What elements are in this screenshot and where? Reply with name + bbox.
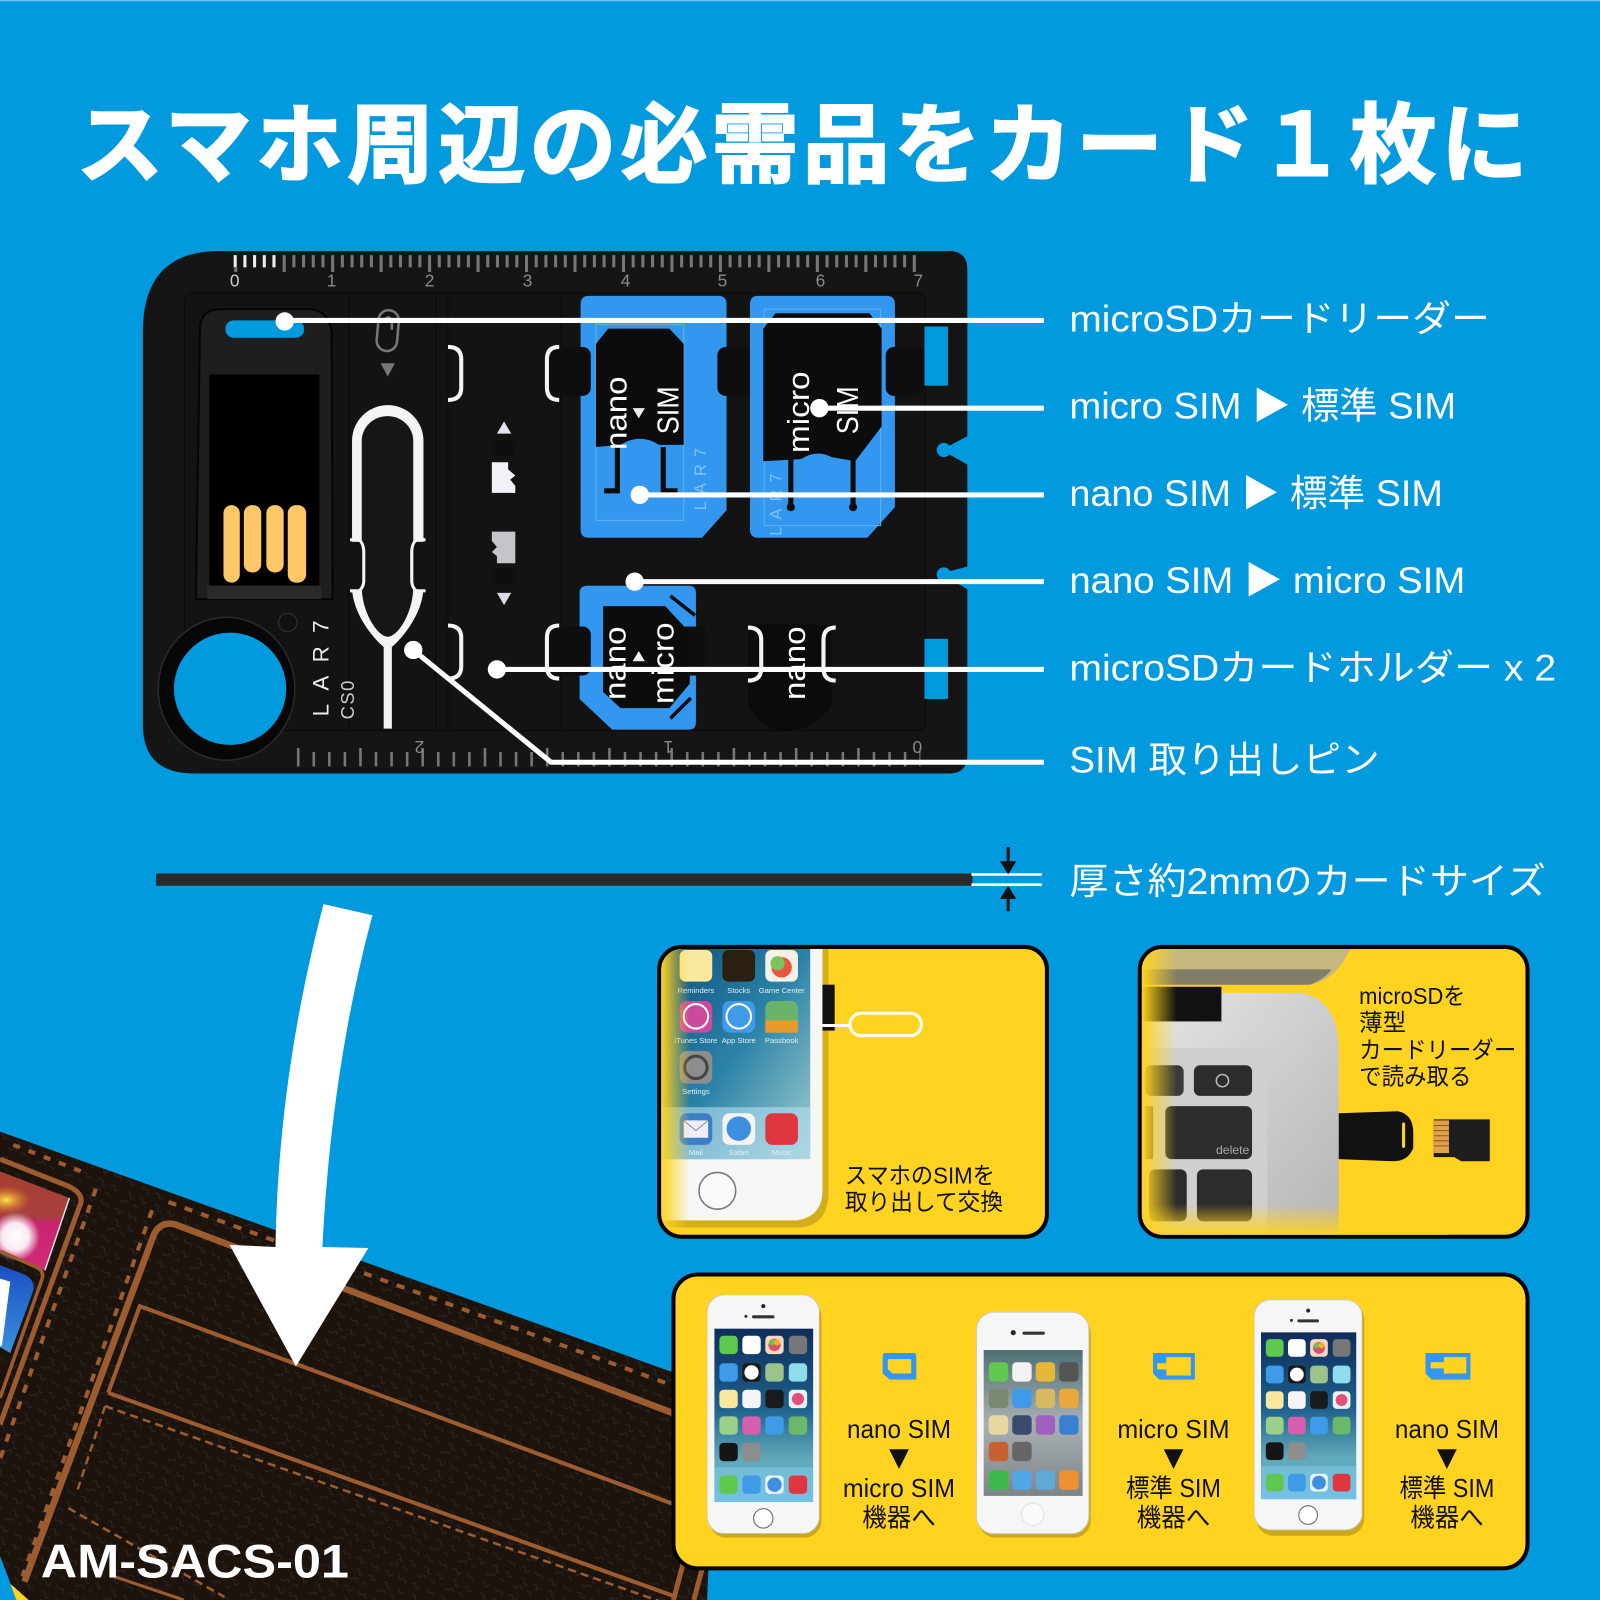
multi-tool card xyxy=(143,251,968,773)
top ruler: 6 xyxy=(816,271,825,291)
column text: micro to standard xyxy=(1117,1416,1230,1533)
bottom ruler xyxy=(297,737,922,759)
nano SIM slot xyxy=(748,624,832,731)
column text: nano to micro: micro SIM xyxy=(843,1475,955,1503)
bottom ruler: 1 xyxy=(664,737,673,757)
icon: nano adapter xyxy=(883,1353,916,1380)
top ruler: 1 xyxy=(327,271,336,291)
label: nano SIM: nano SIM ▶ 標準 SIM xyxy=(1069,473,1443,514)
label: nano to micro: nano SIM ▶ micro SIM xyxy=(1069,560,1465,601)
label: SIM pin: SIM 取り出しピン xyxy=(1069,739,1380,780)
adapter: micro to standard: micro xyxy=(782,371,816,453)
column text: micro to standard: 機器へ xyxy=(1137,1505,1210,1533)
fade left xyxy=(1142,949,1177,1235)
USB microSD reader xyxy=(196,309,333,599)
label: microSD holder: microSDカードホルダー x 2 xyxy=(1069,648,1556,689)
laptop keyboard close-up: delete xyxy=(1216,1143,1250,1157)
bottom ruler: 0 xyxy=(913,737,922,757)
adapter: nano to standard: nano xyxy=(600,377,634,450)
leader: nano to micro xyxy=(626,572,1044,591)
column text: nano to micro: ▼ xyxy=(882,1439,916,1476)
adapter: nano to standard: SIM xyxy=(652,386,686,434)
leader: micro SIM xyxy=(810,399,1044,417)
fade bottom xyxy=(1142,1204,1448,1237)
USB reader inserted xyxy=(1339,1111,1413,1161)
caption: で読み取る xyxy=(1359,1064,1471,1090)
icon: micro adapter xyxy=(1153,1353,1195,1380)
panel: SIM compatibility xyxy=(673,1274,1528,1568)
column text: nano to standard: ▼ xyxy=(1430,1439,1464,1476)
top ruler: 2 xyxy=(425,271,434,291)
column text: nano to standard: 機器へ xyxy=(1410,1505,1484,1533)
column text: nano to micro: nano SIM xyxy=(847,1416,951,1444)
wallet leather texture xyxy=(0,1132,714,1600)
brand marks: LAR7 xyxy=(309,607,334,716)
phone close-up: Mail xyxy=(689,1148,703,1157)
caption: microSDを xyxy=(1359,983,1465,1009)
adapter: micro to standard: SIM xyxy=(831,386,865,434)
icon: paperclip xyxy=(376,309,400,377)
icon: nano to standard adapter xyxy=(1426,1353,1470,1380)
tray structure lines xyxy=(349,296,561,729)
panel: microSD reader xyxy=(1140,947,1528,1237)
SIM ejector pin xyxy=(347,405,429,729)
caption: 取り出して交換 xyxy=(845,1189,1003,1215)
wallet stitching and seams xyxy=(0,1145,704,1600)
card body xyxy=(143,251,967,773)
brand marks xyxy=(309,607,358,719)
laptop keyboard close-up xyxy=(1142,949,1350,1235)
card thickness side view xyxy=(156,847,1042,911)
adapter: micro to standard xyxy=(750,296,924,538)
model number: AM-SACS-01 xyxy=(41,1536,349,1588)
top ruler: 5 xyxy=(718,271,727,291)
key ring hole xyxy=(158,613,297,760)
feature labels xyxy=(1069,299,1556,780)
big white arrow xyxy=(230,904,372,1366)
phone close-up: Settings xyxy=(682,1087,710,1096)
phone close-up: App Store xyxy=(722,1036,756,1045)
column text: nano to micro: 機器へ xyxy=(862,1505,936,1533)
caption: 薄型 xyxy=(1359,1010,1406,1036)
caption xyxy=(1359,983,1516,1090)
wallet illustration xyxy=(0,1132,714,1600)
phone close-up: Passbook xyxy=(765,1036,799,1045)
leader: microSD holder xyxy=(488,660,1044,679)
leader lines xyxy=(276,312,1044,762)
credit card: blue xyxy=(0,1265,34,1353)
top ruler: 4 xyxy=(621,271,631,291)
phone close-up: Game Center xyxy=(759,986,805,995)
adapter: nano to micro: micro xyxy=(646,622,680,704)
phone close-up: Safari xyxy=(729,1148,749,1157)
label: micro SIM: micro SIM ▶ 標準 SIM xyxy=(1069,385,1456,426)
column text: micro to standard: ▼ xyxy=(1157,1439,1190,1476)
top ruler: 3 xyxy=(523,271,532,291)
title: スマホ周辺の必需品をカード１枚に xyxy=(77,98,1528,195)
column text: micro to standard: micro SIM xyxy=(1117,1416,1230,1444)
yellow sliver xyxy=(10,1584,29,1600)
caption xyxy=(845,1163,1003,1215)
phone: iPhone 4 center xyxy=(977,1312,1091,1538)
microSD card xyxy=(1434,1119,1490,1161)
top ruler: 7 xyxy=(914,271,923,291)
nano SIM slot: nano xyxy=(778,627,812,700)
column text: nano to standard: nano SIM xyxy=(1395,1416,1499,1444)
phone close-up: Reminders xyxy=(677,986,715,995)
inner tray xyxy=(185,293,926,731)
label: thickness: 厚さ約2mmのカードサイズ xyxy=(1069,861,1546,902)
wallet body xyxy=(0,1132,714,1600)
credit card: pink xyxy=(0,1171,69,1270)
phone close-up xyxy=(661,949,829,1228)
adapter: nano to micro: nano xyxy=(599,627,633,700)
top ruler: 0 xyxy=(230,271,240,291)
adapter: micro to standard: LAR7 xyxy=(768,466,786,536)
column text: nano to micro xyxy=(843,1416,955,1533)
adapter: nano to micro xyxy=(547,586,705,730)
column text: nano to standard: 標準 SIM xyxy=(1399,1475,1494,1503)
column text: nano to standard xyxy=(1395,1416,1499,1533)
leader: nano SIM xyxy=(631,486,1044,504)
edge notches and windows xyxy=(924,327,968,699)
SIM pin inserted xyxy=(822,985,921,1036)
brand marks: CS0 xyxy=(337,681,358,719)
leader: microSD card reader xyxy=(276,312,1044,331)
adapter: nano to standard: LAR7 xyxy=(692,441,710,510)
panel: SIM swap xyxy=(659,947,1047,1237)
phone close-up: Stocks xyxy=(727,986,750,995)
bottom ruler: 2 xyxy=(415,737,424,757)
phone: iPhone 5s right xyxy=(1254,1300,1364,1536)
card clip brackets xyxy=(448,347,836,681)
top ruler xyxy=(230,261,923,291)
microSD holder markers xyxy=(492,421,515,605)
leader: SIM pin xyxy=(404,641,1044,762)
column text: micro to standard: 標準 SIM xyxy=(1126,1475,1221,1503)
phone close-up: iTunes Store xyxy=(674,1036,717,1045)
fade left xyxy=(661,949,690,1235)
phone: iPhone 5s left xyxy=(707,1295,821,1538)
label: microSD card reader: microSDカードリーダー xyxy=(1069,299,1490,340)
caption: カードリーダー xyxy=(1359,1037,1516,1063)
caption: スマホのSIMを xyxy=(845,1163,995,1189)
phone close-up: Music xyxy=(772,1148,792,1157)
adapter: nano to standard xyxy=(547,296,760,538)
